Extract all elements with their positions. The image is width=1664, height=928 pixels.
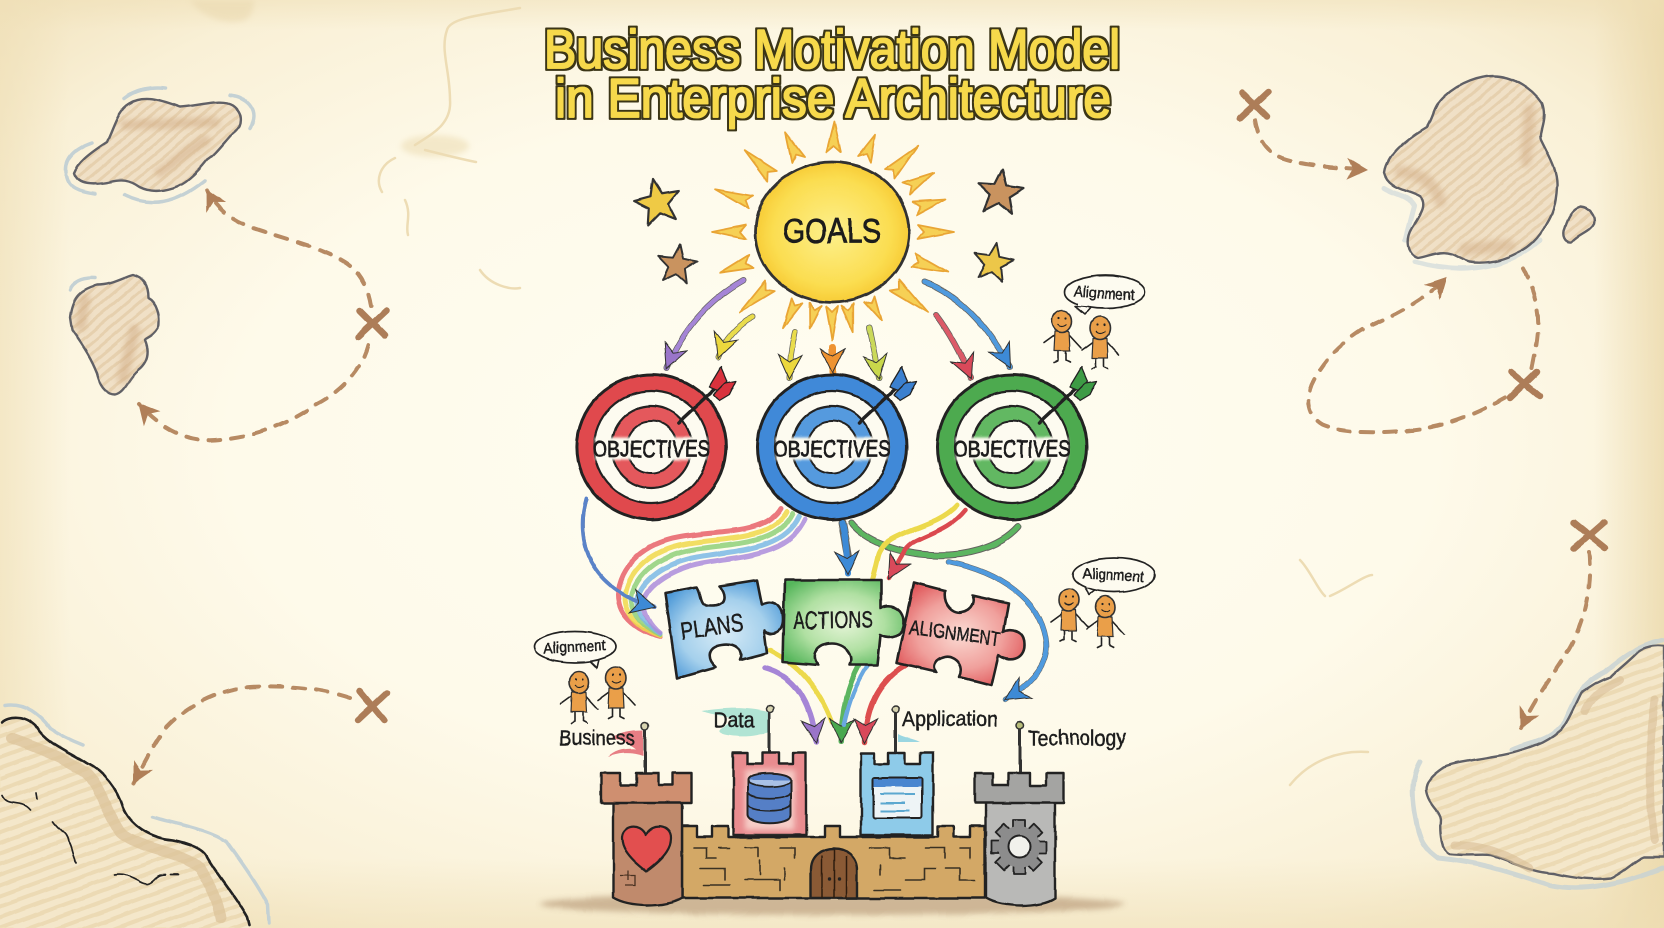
arrows: goals to objectives	[667, 280, 1010, 378]
objectives flows to puzzle	[582, 498, 1047, 700]
puzzle: alignment	[897, 583, 1024, 685]
alignment people: left	[534, 632, 635, 723]
label: business: Business	[559, 727, 635, 750]
route marker: X and dashed arrows to left islands	[139, 190, 386, 440]
goals sun	[712, 122, 954, 340]
puzzle: actions: ACTIONS	[793, 606, 873, 635]
arrow: green arc	[851, 523, 1018, 555]
island: lower left	[70, 275, 159, 394]
arrow: red objective to plans	[582, 498, 655, 608]
label: goals: GOALS	[783, 212, 881, 251]
island: upper left	[66, 87, 254, 202]
tower: technology	[975, 722, 1064, 906]
label: data: Data	[714, 709, 755, 732]
island: upper right	[1384, 76, 1594, 269]
star: upper right	[975, 167, 1025, 215]
arrow: red into castle	[865, 665, 906, 742]
icon: application window	[873, 778, 922, 818]
arrow: lime center-right	[869, 328, 879, 378]
star: lower right	[971, 239, 1016, 283]
map: top-left islands and routes	[66, 87, 386, 440]
sun disc	[755, 162, 909, 302]
flows from puzzle to castle	[765, 650, 906, 742]
star: upper left	[631, 175, 684, 227]
speech bubble: Alignment	[1082, 565, 1145, 586]
arrow: red from green objective	[889, 510, 965, 578]
objectives target: green: OBJECTIVES	[954, 436, 1070, 463]
icon: heart	[622, 827, 671, 871]
title: in Enterprise Architecture	[555, 67, 1111, 129]
icon: gear	[992, 820, 1046, 874]
objectives target: red: OBJECTIVES	[593, 436, 710, 463]
tower: application	[861, 706, 933, 835]
person right	[1087, 596, 1124, 648]
arrow: yellow center-left	[789, 332, 795, 378]
alignment people: right	[1051, 558, 1155, 648]
arrow: red	[936, 315, 971, 378]
arrow: green into castle	[841, 665, 859, 742]
route marker: X and dashed arrow to bottom-right coast	[1521, 522, 1605, 728]
arrow: blue into castle	[844, 665, 868, 725]
objectives target: green	[938, 367, 1097, 520]
sun rays	[712, 122, 954, 340]
route marker: X and dashed arrow to bottom-left coast	[134, 686, 387, 783]
route marker: two X marks and dashed arrows to upper-right island	[1240, 92, 1540, 432]
objectives target: blue	[758, 367, 917, 520]
arrow: yellow left	[718, 317, 753, 357]
puzzle: plans: PLANS	[679, 610, 745, 645]
person left	[1051, 589, 1088, 641]
label: application: Application	[902, 708, 998, 731]
title: Business Motivation Model	[544, 18, 1120, 80]
person right	[598, 667, 635, 719]
title	[544, 18, 1120, 129]
arrow: purple into castle	[765, 668, 816, 742]
alignment people: top right	[1044, 276, 1145, 369]
puzzle: plans	[665, 580, 783, 678]
objectives target: blue: OBJECTIVES	[774, 436, 890, 463]
tower: business	[601, 722, 691, 906]
label: technology: Technology	[1028, 727, 1126, 750]
map: top-right island and routes	[1240, 76, 1594, 432]
puzzle pieces	[665, 580, 1024, 685]
landmass: bottom right	[1413, 640, 1664, 888]
arrow: blue big right loop to castle	[949, 562, 1047, 700]
person left	[561, 671, 598, 723]
arrow: blue	[924, 282, 1010, 367]
castle	[540, 706, 1126, 915]
landmass: bottom left	[0, 705, 269, 928]
ground shadow	[540, 893, 1124, 915]
speech bubble: Alignment	[543, 637, 607, 658]
speech bubble: Alignment	[1074, 283, 1136, 304]
puzzle: actions	[783, 580, 904, 665]
arrow: blue to actions	[842, 523, 848, 574]
rainbow flow	[618, 508, 805, 637]
objectives target: red	[577, 367, 736, 520]
icon: database	[748, 773, 791, 823]
stars around sun	[631, 167, 1025, 284]
person left	[1044, 310, 1081, 362]
arrow: purple	[667, 280, 744, 368]
castle door	[811, 849, 857, 898]
arrow: yellow into castle	[770, 650, 832, 722]
star: lower left	[655, 242, 700, 284]
person right	[1082, 317, 1119, 369]
castle wall	[682, 826, 985, 898]
tower: data	[702, 706, 806, 835]
arrow: yellow from green objective	[871, 505, 957, 584]
puzzle: alignment: ALIGNMENT	[908, 617, 1002, 651]
arrow: orange center	[830, 347, 836, 372]
map: bottom-right coast and route	[1413, 522, 1664, 888]
map: bottom-left coast and route	[0, 686, 387, 928]
